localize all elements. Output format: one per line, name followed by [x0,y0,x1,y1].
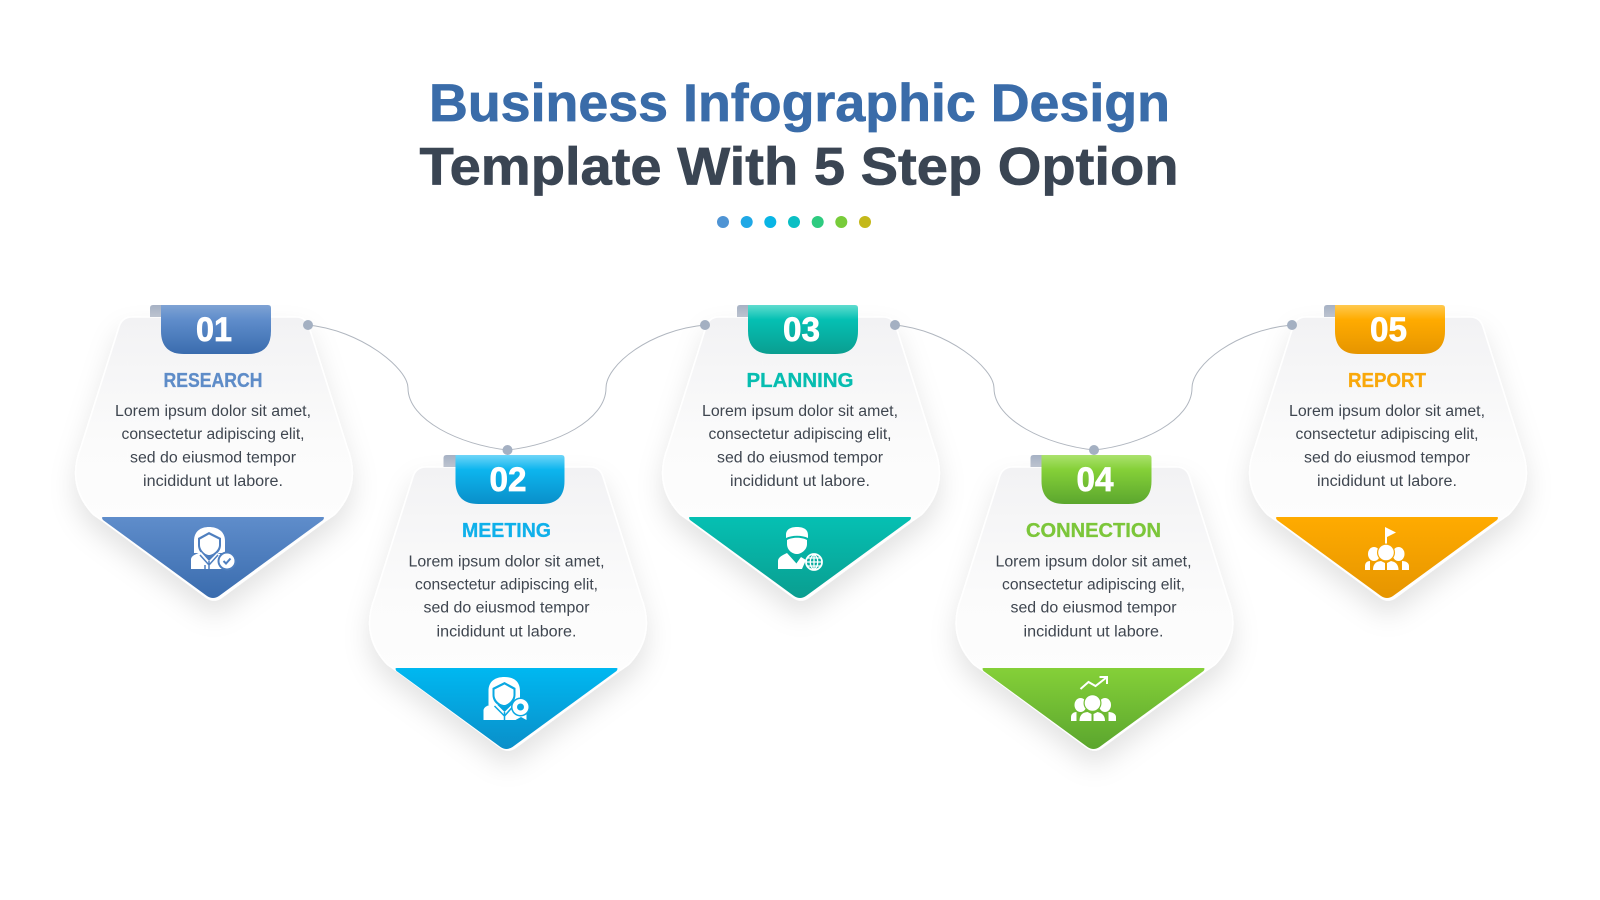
number tab [748,305,858,354]
step label: REPORT [1348,370,1426,392]
body text: incididunt ut labore. [1317,473,1457,490]
icon: woman with check badge [191,527,236,570]
body text: sed do eiusmod tempor [424,600,590,616]
card body [1250,317,1526,600]
tab back fold [1030,455,1054,467]
step label: MEETING [462,520,551,542]
number tab [1335,305,1445,354]
pointer triangle [102,517,324,598]
body text [408,554,604,640]
body text: consectetur adipiscing elit, [709,426,891,443]
step number: 03 [783,311,820,349]
body text: incididunt ut labore. [143,473,283,490]
body text: Lorem ipsum dolor sit amet, [702,403,898,420]
body text: sed do eiusmod tempor [130,450,296,466]
body text: sed do eiusmod tempor [717,450,883,466]
body text: consectetur adipiscing elit, [122,426,304,443]
body text [996,554,1192,640]
number tab [1042,455,1152,504]
card body [663,317,939,600]
connector lines [308,325,1292,450]
body text [115,403,311,490]
icon: team with growth arrow [1071,677,1116,721]
body text: consectetur adipiscing elit, [1296,426,1478,443]
card body [956,467,1233,750]
title line 1: Business Infographic Design [429,74,1170,133]
pointer triangle [982,668,1204,749]
title line 2: Template With 5 Step Option [420,138,1178,196]
icon: team with flag [1365,527,1409,570]
tab back fold [444,455,466,467]
body text: incididunt ut labore. [436,624,576,640]
title [420,74,1178,196]
panel: step 1 research [76,305,352,600]
step label: PLANNING [746,370,854,392]
body text: sed do eiusmod tempor [1010,600,1176,616]
card body [76,317,352,600]
panel: step 5 report [1250,305,1526,600]
body text: Lorem ipsum dolor sit amet, [1289,403,1485,420]
body text: consectetur adipiscing elit, [1002,576,1185,594]
body text [1289,403,1485,490]
step number: 05 [1370,311,1407,349]
body text: sed do eiusmod tempor [1304,450,1470,466]
step label: CONNECTION [1026,520,1161,542]
body text [702,403,898,490]
tab back fold [737,305,760,317]
panel: step 4 connection [956,455,1233,750]
step number: 04 [1076,461,1114,499]
body text: Lorem ipsum dolor sit amet, [995,554,1192,570]
body text: Lorem ipsum dolor sit amet, [408,554,605,570]
tab back fold [1324,305,1347,317]
pointer triangle [689,517,911,598]
pointer triangle [1276,517,1498,598]
pointer triangle [396,668,618,749]
tab back fold [150,305,173,317]
panel: step 3 planning [663,305,939,600]
body text: incididunt ut labore. [730,473,870,490]
body text: incididunt ut labore. [1024,624,1164,640]
icon: woman with rosette [484,677,530,720]
number tab [161,305,271,354]
icon: man with globe [778,527,822,570]
step number: 01 [196,311,232,349]
connector nodes [303,320,1297,455]
body text: consectetur adipiscing elit, [415,576,598,594]
card body [370,467,646,750]
body text: Lorem ipsum dolor sit amet, [115,403,311,420]
step number: 02 [490,461,526,499]
panel: step 2 meeting [370,455,646,750]
number tab [456,455,564,504]
step label: RESEARCH [164,370,262,392]
decorative dot row [717,216,871,228]
